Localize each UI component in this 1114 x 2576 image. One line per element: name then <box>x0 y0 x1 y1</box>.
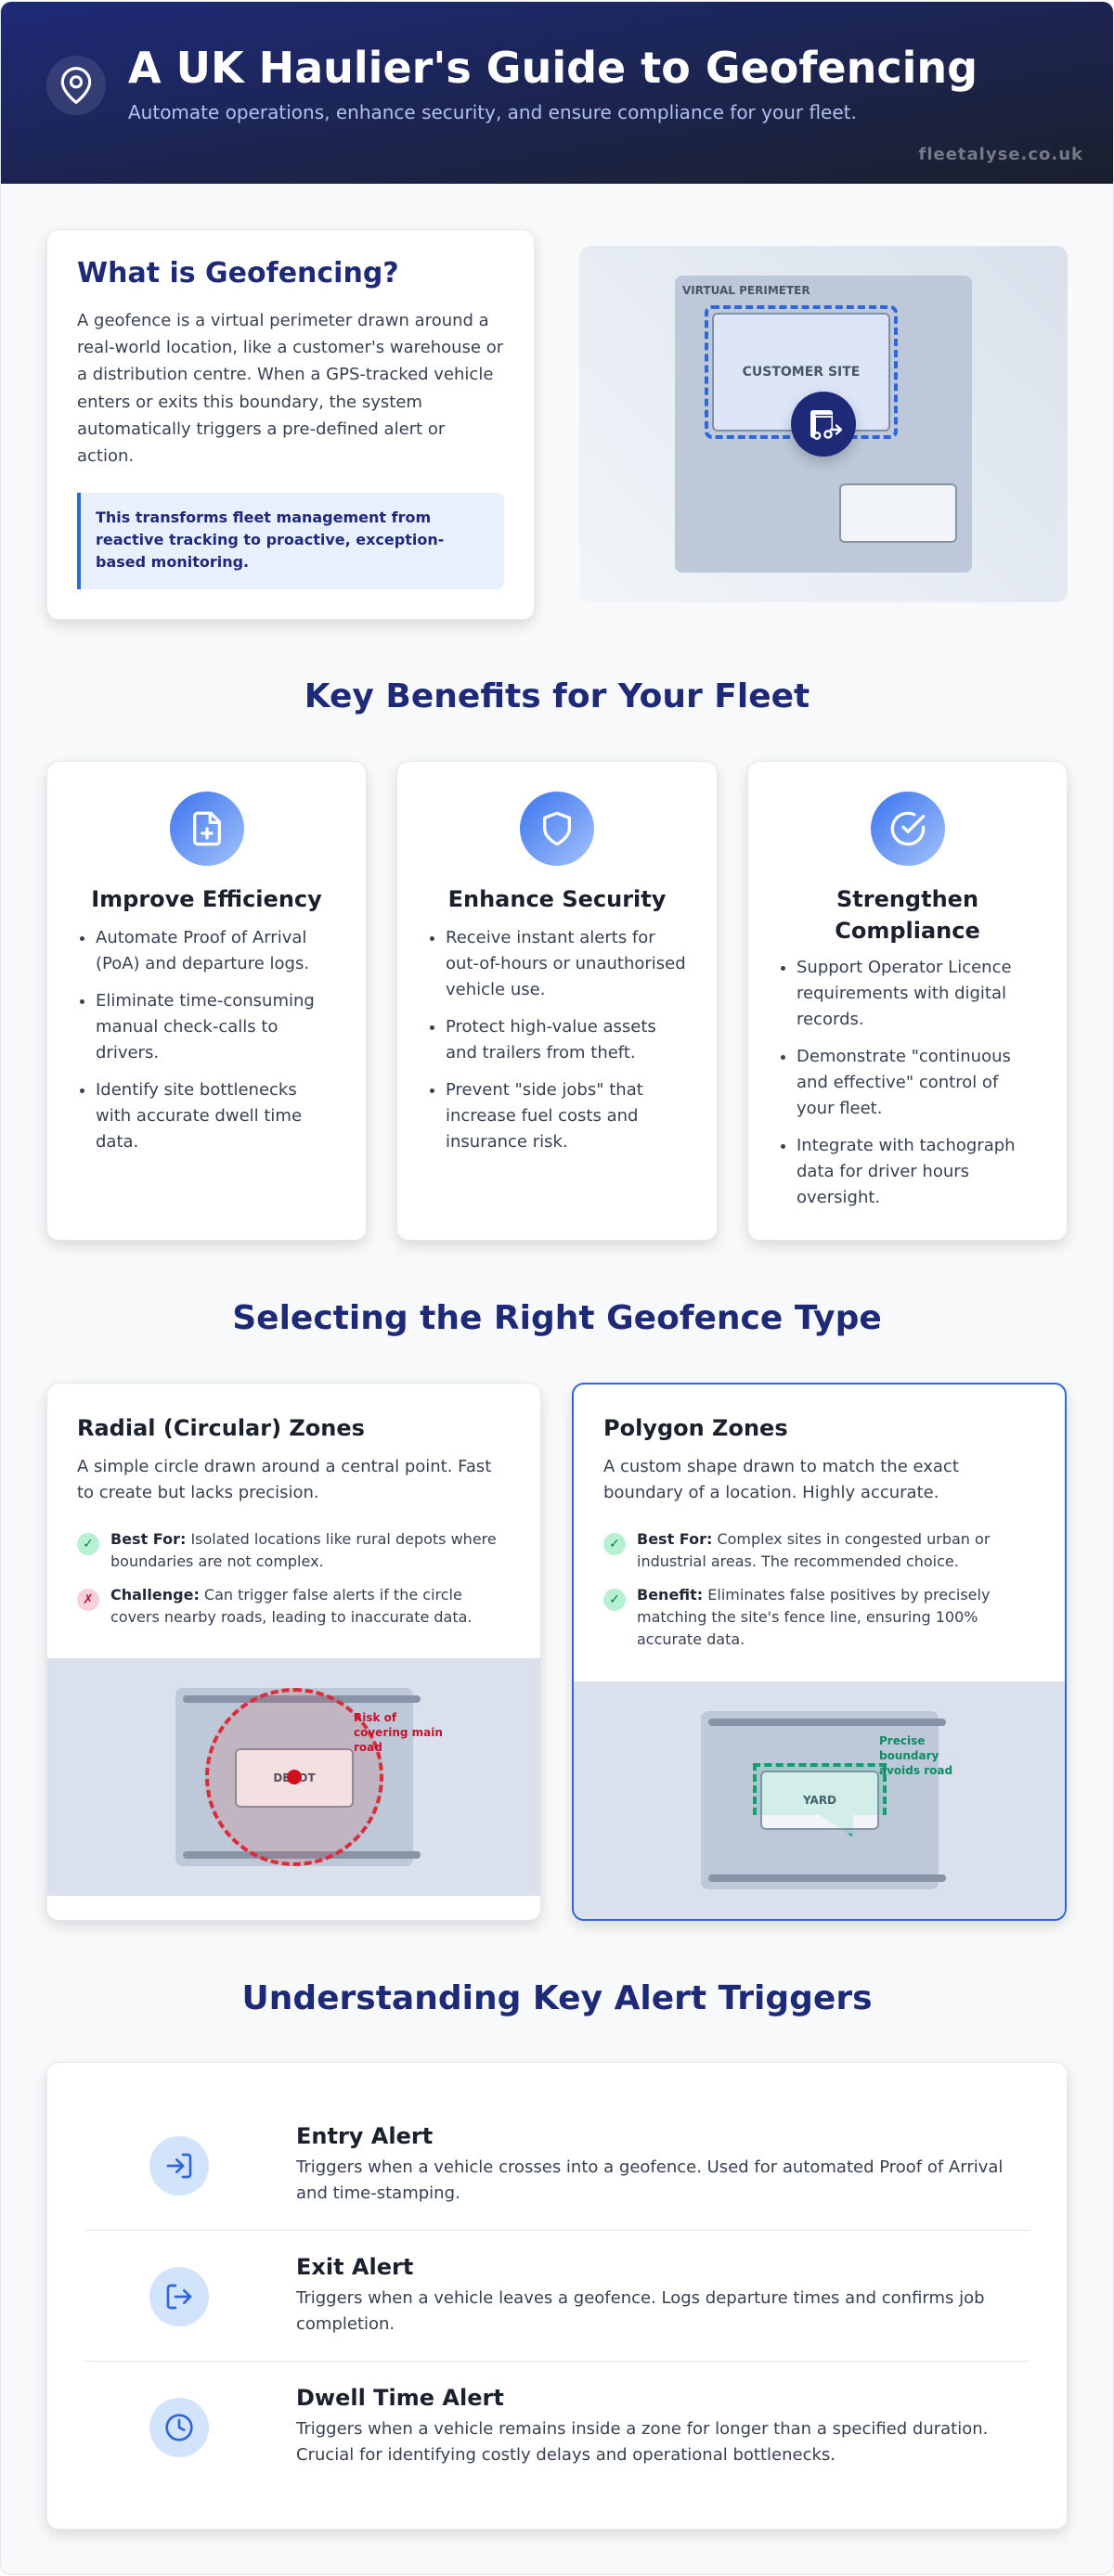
heading: alert triggers: Understanding Key Alert Triggers <box>241 1979 873 2017</box>
subtitle: Automate operations, enhance security, and ensure compliance for your fleet. <box>128 101 857 123</box>
icon: entry <box>149 2136 209 2196</box>
road bottom <box>183 1851 421 1859</box>
benefit: Benefit: Eliminates false positives by precisely <box>637 1586 990 1604</box>
risk label: road <box>354 1741 382 1754</box>
description: A geofence is a virtual perimeter drawn around a <box>77 311 489 330</box>
callout <box>77 493 504 589</box>
benefit <box>637 1586 990 1648</box>
panel: what is geofencing <box>46 229 535 620</box>
best for: Best For: Complex sites in congested urban or <box>637 1530 990 1548</box>
best for: industrial areas. The recommended choice. <box>637 1552 959 1570</box>
dwell description <box>295 2419 988 2465</box>
yard building <box>760 1771 879 1830</box>
benefit list: records. <box>797 1010 864 1029</box>
zone description: to create but lacks precision. <box>77 1483 319 1502</box>
benefit list: manual check-calls to <box>96 1017 278 1037</box>
geofence dashed boundary <box>705 305 898 439</box>
customer site box: CUSTOMER SITE <box>743 365 860 380</box>
heading: geofence type: Selecting the Right Geofence Type <box>232 1299 882 1337</box>
icon: shield <box>520 792 594 866</box>
benefit list: Support Operator Licence <box>797 958 1012 977</box>
exit title: Exit Alert <box>296 2254 413 2280</box>
row: entry alert <box>84 2100 1030 2231</box>
icon: tick <box>77 1533 99 1555</box>
zone description: boundary of a location. Highly accurate. <box>603 1483 939 1502</box>
description: action. <box>77 446 134 466</box>
road bottom <box>708 1874 946 1882</box>
label: virtual perimeter: VIRTUAL PERIMETER <box>682 284 810 297</box>
benefit list: oversight. <box>797 1188 880 1207</box>
description: automatically triggers a pre-defined alert or <box>77 419 445 439</box>
benefit list <box>80 928 315 1152</box>
map area <box>175 1688 413 1866</box>
icon: tick <box>603 1533 626 1555</box>
icon: clock <box>149 2398 209 2457</box>
benefit list: Protect high-value assets <box>446 1017 656 1037</box>
panel: strengthen compliance <box>747 761 1068 1241</box>
description: enters or exits this boundary, the system <box>77 393 422 412</box>
description <box>77 311 503 466</box>
other building <box>839 483 957 543</box>
dwell description: Triggers when a vehicle remains inside a zone for longer than a specified duration. <box>296 2419 988 2439</box>
depot building: DEPOT <box>273 1771 316 1784</box>
exit description <box>295 2288 985 2334</box>
icon: vehicle marker <box>791 392 856 457</box>
zone description: A simple circle drawn around a central point. Fast <box>77 1457 491 1476</box>
icon: tick: ✓ <box>83 1537 94 1552</box>
diagram: virtual perimeter <box>579 246 1068 602</box>
icon: document plus <box>170 792 244 866</box>
card title: Compliance <box>835 918 980 944</box>
best for <box>637 1530 990 1570</box>
panel: improve efficiency <box>46 761 367 1241</box>
benefit list: vehicle use. <box>446 980 545 999</box>
benefit list: Identify site bottlenecks <box>96 1080 297 1100</box>
exit description: Triggers when a vehicle leaves a geofence. Logs departure times and confirms job <box>296 2288 985 2308</box>
benefit list: insurance risk. <box>446 1132 568 1152</box>
entry title: Entry Alert <box>296 2123 433 2149</box>
challenge: covers nearby roads, leading to inaccurate data. <box>110 1608 473 1626</box>
map area <box>701 1711 939 1889</box>
zone description: A custom shape drawn to match the exact <box>603 1457 959 1476</box>
heading: What is Geofencing? <box>77 257 399 290</box>
precision label: boundary <box>879 1749 939 1762</box>
benefit list: Prevent "side jobs" that <box>446 1080 643 1100</box>
precision label <box>879 1734 952 1777</box>
dwell description: Crucial for identifying costly delays and operational bottlenecks. <box>296 2445 836 2465</box>
zone description <box>603 1457 959 1502</box>
icon: tick <box>603 1589 626 1611</box>
card title: Improve Efficiency <box>91 886 322 912</box>
road top <box>708 1719 946 1726</box>
zone title: Radial (Circular) Zones <box>77 1415 365 1441</box>
callout: reactive tracking to proactive, exception- <box>96 531 444 548</box>
benefit list: Eliminate time-consuming <box>96 991 315 1011</box>
benefit list: drivers. <box>96 1043 159 1063</box>
zone description <box>77 1457 491 1502</box>
benefit list: requirements with digital <box>797 984 1006 1003</box>
benefit list: with accurate dwell time <box>96 1106 302 1126</box>
precision label: avoids road <box>879 1764 952 1777</box>
yard building: YARD <box>803 1794 836 1807</box>
header banner <box>1 2 1113 184</box>
benefit list: increase fuel costs and <box>446 1106 638 1126</box>
map area <box>675 276 972 573</box>
benefit list: data. <box>96 1132 138 1152</box>
best for: Best For: Isolated locations like rural depots where <box>110 1530 497 1548</box>
callout: This transforms fleet management from <box>96 509 431 526</box>
challenge <box>110 1586 473 1626</box>
row: exit alert <box>84 2231 1030 2362</box>
icon: tick: ✓ <box>609 1537 620 1552</box>
benefit: accurate data. <box>637 1630 745 1648</box>
benefit list: Receive instant alerts for <box>446 928 655 947</box>
benefit list: out-of-hours or unauthorised <box>446 954 686 973</box>
icon: tick: ✓ <box>609 1592 620 1607</box>
polygon geofence <box>753 1763 887 1837</box>
icon: location pin <box>46 56 106 115</box>
benefit list: and effective" control of <box>797 1073 998 1092</box>
risk label: covering main <box>354 1726 443 1739</box>
icon: exit <box>149 2267 209 2326</box>
diagram: radial zone <box>47 1658 541 1896</box>
panel: enhance security <box>396 761 718 1241</box>
panel: alert triggers <box>46 2062 1068 2530</box>
road top <box>183 1695 421 1703</box>
benefit list: Automate Proof of Arrival <box>96 928 306 947</box>
entry description: and time-stamping. <box>296 2183 460 2203</box>
depot building <box>235 1748 354 1808</box>
card title: Enhance Security <box>448 886 666 912</box>
benefit list: Demonstrate "continuous <box>797 1047 1011 1066</box>
description: real-world location, like a customer's warehouse or <box>77 338 503 357</box>
benefit list <box>781 958 1016 1207</box>
dwell title: Dwell Time Alert <box>296 2385 504 2411</box>
brand domain: fleetalyse.co.uk <box>919 145 1083 164</box>
icon: check circle <box>871 792 945 866</box>
icon: cross: ✗ <box>83 1592 94 1607</box>
benefit list: and trailers from theft. <box>446 1043 636 1063</box>
benefit list: (PoA) and departure logs. <box>96 954 309 973</box>
centre point <box>287 1770 302 1784</box>
entry description <box>295 2157 1003 2203</box>
benefit list: Integrate with tachograph <box>797 1136 1016 1155</box>
zone title: Polygon Zones <box>603 1415 788 1441</box>
panel: polygon zones <box>572 1383 1067 1921</box>
benefit list <box>430 928 686 1152</box>
radial geofence <box>205 1688 383 1866</box>
best for: boundaries are not complex. <box>110 1552 324 1570</box>
panel: radial zones <box>46 1383 541 1921</box>
precision label: Precise <box>879 1734 925 1747</box>
best for <box>110 1530 497 1570</box>
callout: based monitoring. <box>96 553 249 571</box>
exit description: completion. <box>296 2314 395 2334</box>
row: dwell time alert <box>149 2385 988 2465</box>
description: a distribution centre. When a GPS-tracked vehicle <box>77 365 493 384</box>
challenge: Challenge: Can trigger false alerts if the circle <box>110 1586 462 1604</box>
diagram: polygon zone <box>574 1681 1066 1923</box>
entry description: Triggers when a vehicle crosses into a geofence. Used for automated Proof of Arrival <box>296 2157 1003 2177</box>
risk label: Risk of <box>354 1711 396 1724</box>
benefit list: data for driver hours <box>797 1162 969 1181</box>
card title: Strengthen <box>836 886 978 912</box>
heading: key benefits: Key Benefits for Your Fleet <box>304 677 810 715</box>
title: A UK Haulier's Guide to Geofencing <box>128 43 978 93</box>
customer site box <box>712 313 890 431</box>
benefit: matching the site's fence line, ensuring 100% <box>637 1608 978 1626</box>
risk label <box>354 1711 443 1754</box>
card title <box>835 886 980 944</box>
benefit list: your fleet. <box>797 1099 882 1118</box>
icon: cross <box>77 1589 99 1611</box>
